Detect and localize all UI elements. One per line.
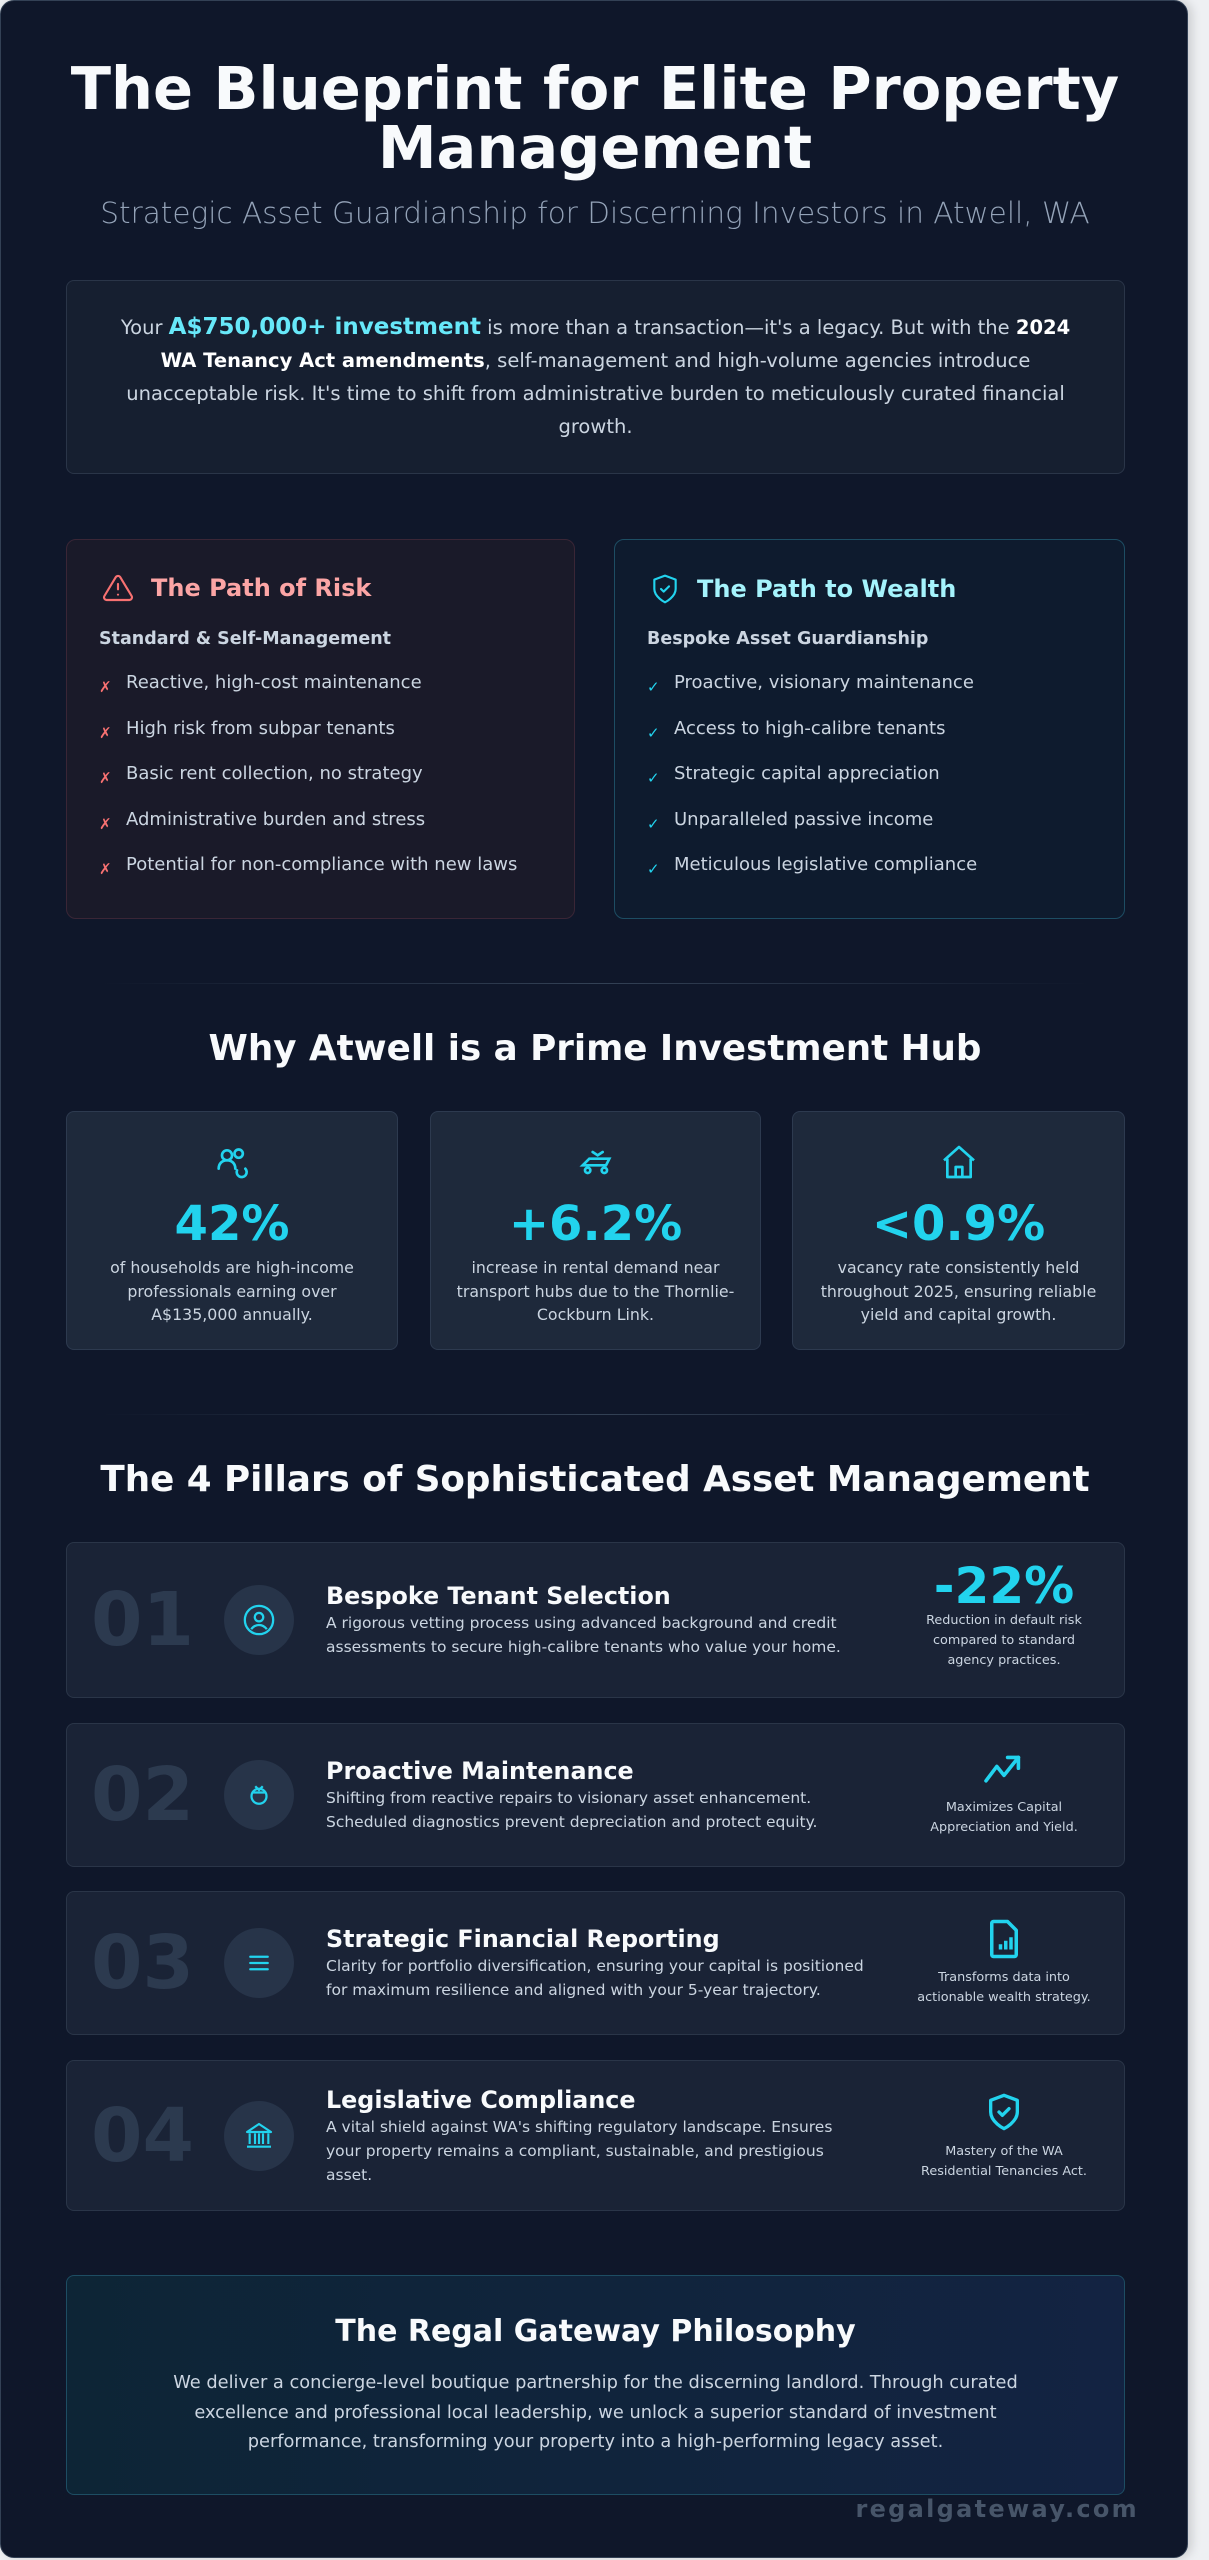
panel: philosophy: [66, 2275, 1125, 2495]
icon: user: [224, 1585, 294, 1655]
stat card: 42%: [66, 1111, 398, 1350]
list: benefits: Meticulous legislative compliance: [674, 854, 977, 875]
list: risks: High risk from subpar tenants: [126, 718, 395, 739]
icon: shield: Residential Tenancies Act.: [921, 2164, 1087, 2178]
icon: shield check: [653, 574, 677, 604]
pillar 02: Proactive Maintenance: [326, 1757, 634, 1785]
list: benefits: Strategic capital appreciation: [674, 763, 940, 784]
pillar 02: 02: [91, 1752, 194, 1838]
list: risks: Basic rent collection, no strategy: [126, 763, 423, 784]
heading: path to wealth: The Path to Wealth: [697, 575, 956, 603]
list: benefits: ✓: [647, 678, 660, 696]
title: Management: [378, 113, 812, 182]
list: risks: [99, 672, 517, 878]
stat: -22%: -22%: [934, 1557, 1074, 1615]
list: benefits: [647, 672, 977, 878]
list: risks: ✗: [99, 815, 112, 833]
list: risks: Potential for non-compliance with new laws: [126, 854, 517, 875]
icon: warning: [102, 574, 134, 602]
panel: path to wealth: [614, 539, 1125, 919]
list: benefits: ✓: [647, 724, 660, 742]
pillar 04: 04: [91, 2092, 194, 2178]
icon: bank: [224, 2100, 294, 2170]
stat card: 42%: of households are high-income professionals earning over A$135,000 annually.: [110, 1258, 354, 1324]
pillar 03: Clarity for portfolio diversification, ensuring your capital is positioned for maximum resilience and aligned with your 5-year trajectory.: [326, 1957, 864, 1999]
icon: menu: [224, 1928, 294, 1998]
pillar 04: [66, 2060, 1125, 2211]
subtitle: Strategic Asset Guardianship for Discerning Investors in Atwell, WA: [100, 196, 1090, 230]
subheading: Standard & Self-Management: [99, 629, 391, 649]
list: risks: Administrative burden and stress: [126, 809, 425, 830]
panel: path of risk: [66, 539, 575, 919]
pillar 01: [66, 1542, 1125, 1698]
heading: 4 pillars: The 4 Pillars of Sophisticated Asset Management: [100, 1459, 1090, 1500]
pillar 03: [66, 1891, 1125, 2035]
icon: shield: Mastery of the WA: [945, 2144, 1063, 2158]
list: risks: ✗: [99, 860, 112, 878]
pillar 01: Bespoke Tenant Selection: [326, 1582, 671, 1610]
list: benefits: Access to high-calibre tenants: [674, 718, 945, 739]
icon: trend up: [930, 1756, 1078, 1835]
icon: shield: [921, 2094, 1087, 2178]
list: risks: ✗: [99, 724, 112, 742]
footer: website: regalgateway.com: [855, 2495, 1139, 2523]
list: benefits: ✓: [647, 860, 660, 878]
stat: -22%: [926, 1557, 1082, 1668]
intro callout: [66, 280, 1125, 474]
pillar 02: Shifting from reactive repairs to visionary asset enhancement. Scheduled diagnostics prevent depreciation and protect equity.: [326, 1789, 818, 1831]
stat card: +6.2%: increase in rental demand near transport hubs due to the Thornlie-Cockburn Link.: [457, 1258, 734, 1324]
icon: report: actionable wealth strategy.: [917, 1990, 1091, 2005]
icon: people: [217, 1148, 248, 1178]
icon: maintenance: [224, 1760, 294, 1830]
heading: path of risk: The Path of Risk: [151, 574, 371, 602]
stat card: +6.2%: [430, 1111, 761, 1350]
subheading: Bespoke Asset Guardianship: [647, 629, 928, 649]
title: The Blueprint for Elite Property: [71, 54, 1119, 123]
list: risks: Reactive, high-cost maintenance: [126, 672, 422, 693]
intro callout: Your A$750,000+ investment is more than a transaction—it's a legacy. But with the 2024 WA Tenancy Act amendments, self-management and high-volume agencies introduce unacceptable risk. It's time to shift from administrative burden to meticulously curated financial growth.: [121, 314, 1070, 438]
icon: trend up: Maximizes Capital: [946, 1800, 1062, 1815]
list: benefits: ✓: [647, 815, 660, 833]
text: philosophy: We deliver a concierge-level boutique partnership for the discerning landlord. Through curated excellence and professional local leadership, we unlock a superior standard of investment performance, transforming your property into a high-performing legacy asset.: [173, 2372, 1018, 2452]
stat: -22%: Reduction in default risk compared to standard agency practices.: [926, 1613, 1082, 1668]
stat card: <0.9%: <0.9%: [872, 1196, 1045, 1252]
pillar 04: Legislative Compliance: [326, 2086, 636, 2114]
pillar 04: A vital shield against WA's shifting regulatory landscape. Ensures your property remains a compliant, sustainable, and prestigious asset.: [326, 2118, 832, 2184]
stat card: 42%: 42%: [175, 1196, 289, 1252]
icon: report: Transforms data into: [938, 1970, 1070, 1985]
icon: house: [943, 1146, 975, 1178]
list: risks: ✗: [99, 678, 112, 696]
icon: trend up: Appreciation and Yield.: [930, 1820, 1078, 1835]
pillar 02: [66, 1723, 1125, 1867]
pillar 01: A rigorous vetting process using advanced background and credit assessments to secure high-calibre tenants who value your home.: [326, 1614, 841, 1656]
heading: why atwell: Why Atwell is a Prime Investment Hub: [209, 1028, 981, 1069]
pillar 03: Strategic Financial Reporting: [326, 1925, 720, 1953]
title: [71, 54, 1119, 182]
pillar 01: 01: [91, 1577, 194, 1663]
stat card: <0.9%: [792, 1111, 1125, 1350]
list: benefits: Unparalleled passive income: [674, 809, 933, 830]
list: benefits: ✓: [647, 769, 660, 787]
list: risks: ✗: [99, 769, 112, 787]
stat card: +6.2%: +6.2%: [509, 1196, 682, 1252]
pillar 03: 03: [91, 1920, 194, 2006]
list: benefits: Proactive, visionary maintenance: [674, 672, 974, 693]
icon: transport: [580, 1150, 612, 1174]
heading: philosophy: The Regal Gateway Philosophy: [335, 2314, 856, 2349]
stat card: <0.9%: vacancy rate consistently held throughout 2025, ensuring reliable yield and capital growth.: [821, 1258, 1096, 1324]
icon: report: [917, 1920, 1091, 2005]
